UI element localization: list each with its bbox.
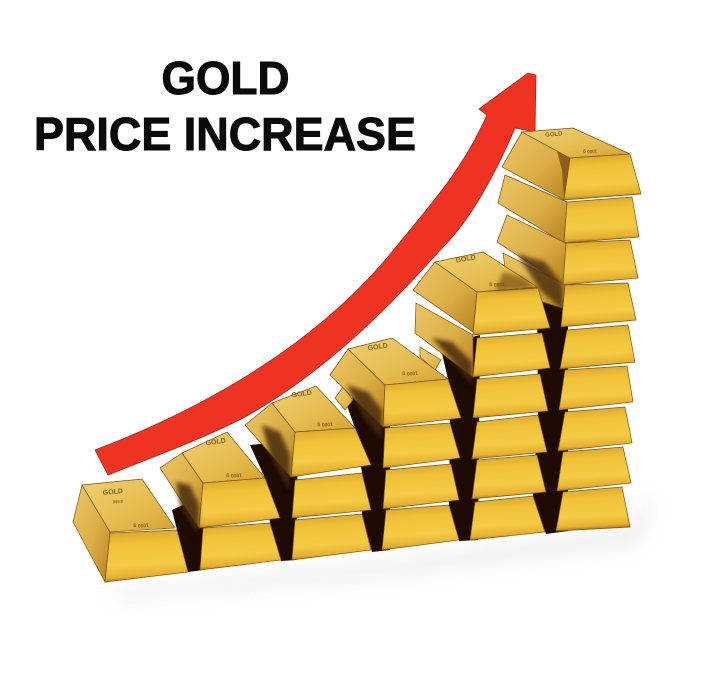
bar 5-3 [472,415,547,459]
stack 2 [160,432,281,570]
bar 5-5 [473,333,550,377]
bar 6-2 [557,447,631,491]
contact shadow stack 4 [347,385,382,440]
bar 6-5 [560,325,635,369]
bar stamp: GOLD [291,390,312,399]
bar stamp: GOLD [205,438,226,447]
red rising arrow [95,73,536,475]
title [34,52,416,160]
bar stamp: 1000 g [489,280,505,288]
bar 6-8 [564,197,639,243]
small block of stack 5 [420,347,441,370]
bar 6-7 [563,240,638,285]
stack 6 top bar [502,128,641,200]
bar stamp: 1000 g [133,521,149,529]
bar stamp [367,343,418,377]
shadow on stack 5 left face [432,338,472,385]
bar 3-2 [292,473,371,518]
bar 5-4 [473,374,548,418]
bar 4-2 [383,464,459,509]
bar 4-4: top bar [330,338,461,427]
contact shadow stack 2 [176,482,199,535]
bar stamp: 1000 g [402,369,418,377]
stack 6: ten tallest bars [497,175,639,531]
bar 6-4 [559,366,633,410]
bar 3-1 [292,514,371,560]
left faces of stack 6 [497,175,567,308]
left faces of stack 5 [415,303,473,377]
bar stamp: 999.9 [113,499,124,504]
bar 2-1 [200,523,281,570]
bar 5-2 [472,455,546,499]
bar stamp: 1000 g [317,420,333,428]
bar 5-6: top bar [413,252,550,335]
bar 4-1 [382,505,459,550]
stack 5 [413,252,550,540]
title line: GOLD: GOLD [162,52,290,104]
bar stamp [545,131,597,154]
contact shadow stack 3 [262,425,290,490]
stack 3 [245,386,371,560]
bar stamp: GOLD [102,488,123,497]
bar stamp: GOLD [367,343,388,352]
dark shadows between stacks [172,268,568,572]
bar 6-1 [556,487,630,531]
bar stamp: GOLD [545,131,563,139]
bar stamp [102,488,149,529]
bar stamp [455,254,505,288]
bar 6-3 [558,407,632,451]
bar stamp [205,438,242,479]
stack 4 [330,338,461,550]
bar stamp: 1000 g [583,149,597,154]
bar stamp: GOLD [455,254,476,265]
shadow on stack 6 left face [517,254,563,310]
bar 5-1 [470,496,545,540]
bar 3-3: top bar [245,386,371,477]
bar 2-2: top bar [160,432,280,528]
bar 6-6 [561,283,636,327]
lower left block of stack 4 [335,387,353,410]
stack 1: single bar [73,479,188,582]
bar 4-3 [383,423,460,468]
bar stamp [291,390,333,428]
ground shadow [90,490,655,600]
shadow on stack 5 top [495,272,535,291]
bar stamp: 1000 g [226,471,242,479]
title line: PRICE INCREASE: PRICE INCREASE [34,108,416,160]
